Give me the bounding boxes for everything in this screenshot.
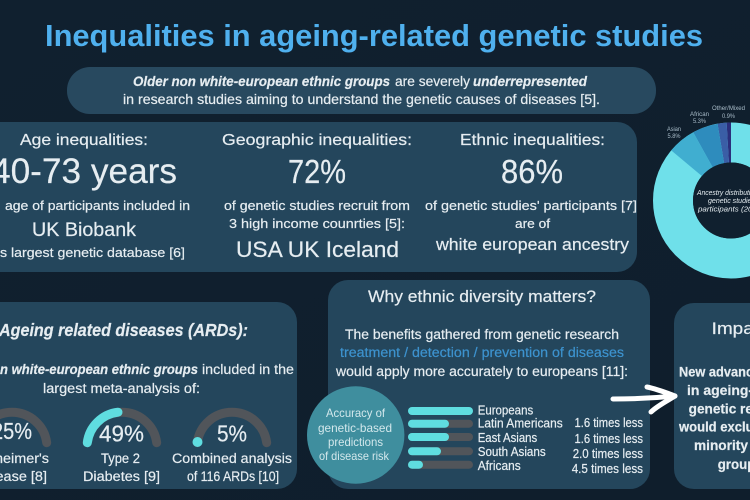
column: age inequalities: age of participants included in — [5, 198, 190, 213]
column: age inequalities — [0, 132, 190, 260]
explanation text: would apply more accurately to europeans [11]: — [335, 364, 628, 379]
gauge: type 2 diabetes 49% — [83, 412, 160, 484]
intro line 1 — [133, 73, 587, 89]
column: geographic inequalities: USA UK Iceland — [236, 237, 399, 262]
bar labels: Africans — [478, 459, 521, 473]
bar labels: Europeans — [478, 403, 533, 417]
ARD description — [0, 362, 294, 396]
donut slice labels: 0.9% — [722, 113, 735, 120]
donut slice labels: 5.3% — [693, 118, 706, 125]
intro line 2: in research studies aiming to understand the genetic causes of diseases [5]. — [123, 91, 600, 107]
gauge: combined analysis 5%: Combined analysis — [172, 451, 292, 466]
gauge: type 2 diabetes 49%: Diabetes [9] — [83, 469, 160, 484]
column: geographic inequalities — [222, 132, 412, 262]
donut chart: ancestry distribution — [667, 105, 750, 258]
column: ethnic inequalities: 86% — [501, 153, 563, 190]
donut centre label — [696, 190, 750, 214]
accuracy ratios: 2.0 times less — [573, 447, 643, 461]
intro line 1: Older non white-european ethnic groups — [133, 73, 390, 89]
column: age inequalities: s largest genetic database [6] — [0, 245, 185, 260]
circle: accuracy callout: genetic-based — [318, 421, 392, 435]
impact text — [678, 365, 750, 472]
gauge: combined analysis 5% — [172, 412, 292, 484]
explanation text — [335, 327, 628, 379]
column: ethnic inequalities: Ethnic inequalities: — [460, 132, 605, 149]
column: geographic inequalities: 72% — [288, 153, 346, 190]
circle: accuracy callout: predictions — [328, 435, 383, 449]
ARD description: n white-european ethnic groups — [0, 362, 198, 377]
column: ethnic inequalities: white european ancestry — [435, 235, 630, 254]
column: age inequalities: UK Biobank — [32, 220, 137, 241]
circle: accuracy callout: of disease risk — [319, 449, 390, 463]
gauge: combined analysis 5%: of 116 ARDs [10] — [187, 469, 279, 484]
bar labels: Latin Americans — [478, 416, 563, 430]
column: geographic inequalities: of genetic studies recruit from — [224, 198, 410, 213]
bar labels — [478, 403, 563, 473]
gauge: Alzheimer's disease 25% — [0, 412, 49, 484]
column: ethnic inequalities: of genetic studies' participants [7] — [425, 198, 637, 213]
column: geographic inequalities: Geographic inequalities: — [222, 132, 412, 149]
donut slice labels: African — [690, 111, 709, 118]
panel: inequalities — [0, 122, 637, 272]
panel: impact — [674, 303, 750, 489]
ARD heading: Ageing related diseases (ARDs): — [0, 320, 248, 340]
gauge: type 2 diabetes 49%: 49% — [99, 421, 144, 447]
accuracy ratios: 1.6 times less — [574, 416, 643, 430]
donut slice labels: 5.8% — [668, 133, 681, 140]
bar labels: South Asians — [478, 445, 546, 459]
circle: accuracy callout — [307, 386, 404, 484]
arrow: diversity to impact — [613, 387, 675, 412]
intro line 1: underrepresented — [473, 73, 587, 89]
panel: intro statement — [67, 67, 656, 114]
ARD description: largest meta-analysis of: — [43, 381, 200, 396]
explanation text: The benefits gathered from genetic research — [345, 327, 619, 342]
bar labels: East Asians — [478, 431, 537, 445]
accuracy ratios — [572, 416, 643, 476]
explanation text: treatment / detection / prevention of diseases — [340, 345, 624, 360]
intro line 1: are severely — [395, 73, 470, 89]
column: age inequalities: Age inequalities: — [20, 132, 148, 149]
bar chart: prediction accuracy — [408, 407, 473, 469]
donut slice labels — [667, 105, 745, 140]
ARD description: included in the — [202, 362, 294, 377]
column: geographic inequalities: 3 high income counrties [5]: — [229, 216, 405, 231]
column: ethnic inequalities — [425, 132, 637, 254]
donut slice labels: Asian — [667, 126, 681, 133]
circle: accuracy callout: Accuracy of — [326, 406, 386, 420]
panel: ageing related diseases — [0, 302, 297, 489]
panel: why ethnic diversity matters — [307, 280, 650, 489]
column: ethnic inequalities: are of — [515, 216, 550, 231]
donut slice labels: Other/Mixed — [712, 105, 745, 112]
accuracy ratios: 4.5 times less — [572, 462, 643, 476]
gauge: combined analysis 5%: 5% — [217, 421, 247, 447]
gauge: type 2 diabetes 49%: Type 2 — [101, 451, 140, 466]
title: Inequalities in ageing-related genetic studies — [45, 19, 703, 53]
accuracy ratios: 1.6 times less — [574, 432, 643, 446]
heading: Why ethnic diversity matters? — [368, 288, 596, 306]
